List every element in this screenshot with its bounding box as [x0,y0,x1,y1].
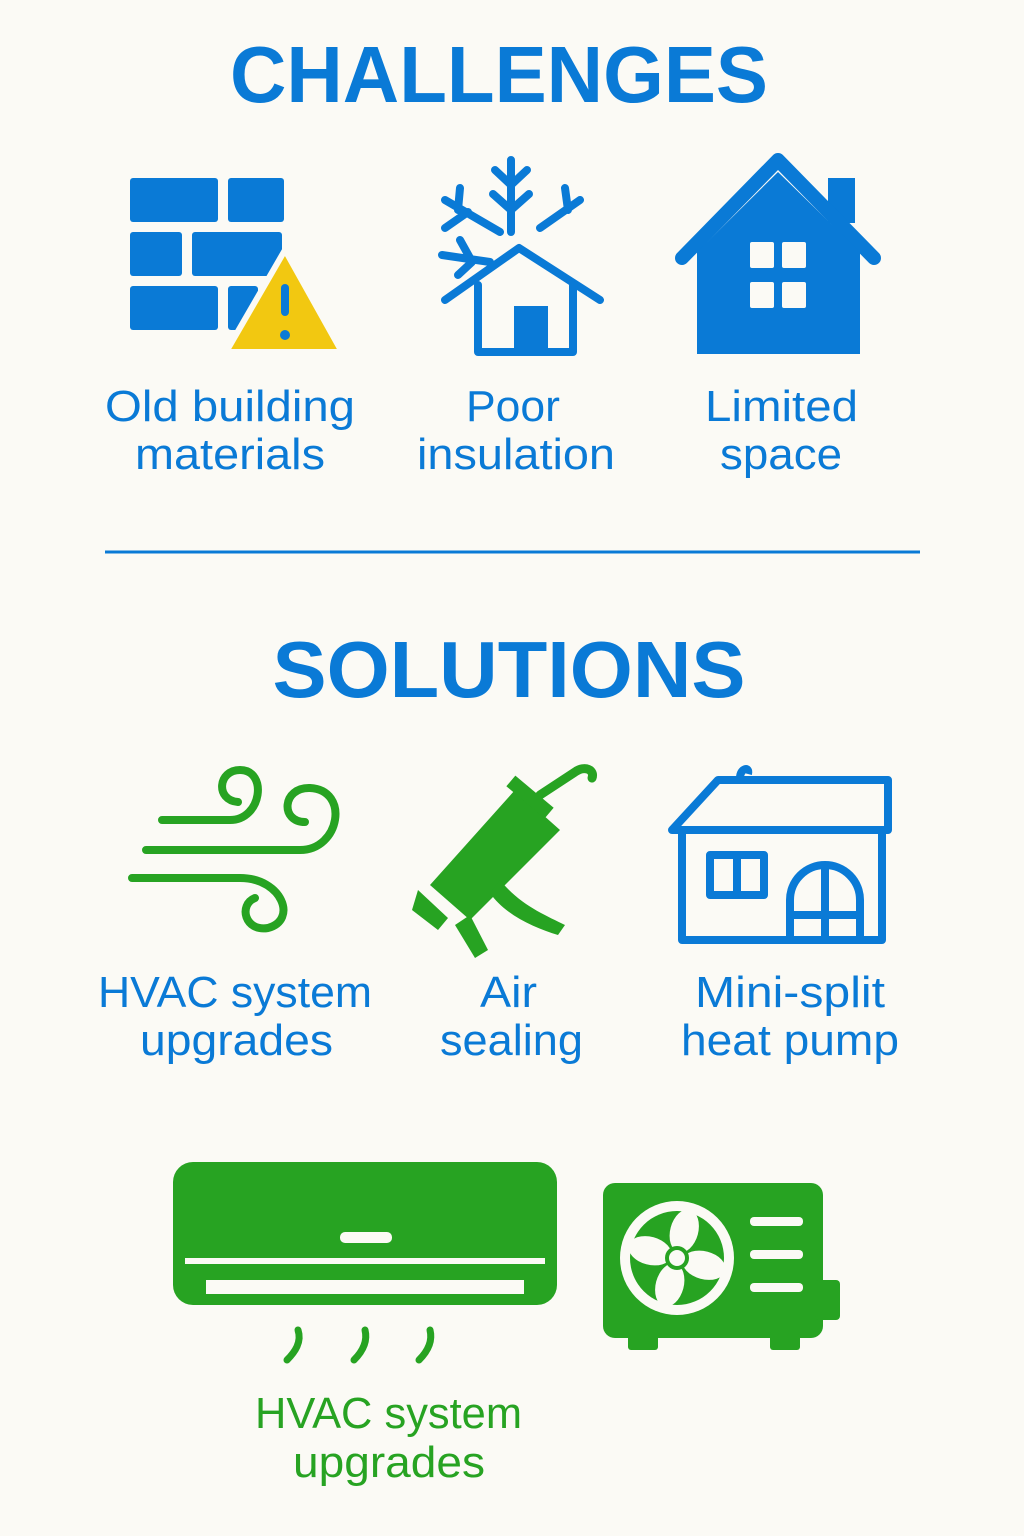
solution: air sealing [412,769,593,1065]
icon: outdoor unit [603,1183,840,1350]
challenge: old building materials [105,178,355,479]
label: limited space: Limited [705,382,858,431]
label: hvac system upgrades [98,968,372,1065]
icon: house with unit [672,769,888,940]
label: old building materials: materials [135,430,325,479]
label: poor insulation: Poor [466,382,560,431]
icon: house [682,160,874,354]
label: mini-split heat pump: Mini-split [695,968,885,1017]
label: mini-split heat pump [681,968,899,1065]
icon: snowflake house [442,160,600,352]
label: mini-split heat pump: heat pump [681,1016,899,1065]
illustration: mini-split system [173,1162,840,1487]
label: hvac system upgrades: HVAC system [98,968,372,1017]
title: solutions: SOLUTIONS [272,625,746,714]
label: hvac system upgrades: upgrades [140,1016,333,1065]
label: limited space [705,382,858,479]
icon: indoor unit [173,1162,557,1360]
label: air sealing: sealing [440,1016,583,1065]
label: limited space: space [720,430,842,479]
challenge: limited space [682,160,874,479]
icon: wind [132,770,335,928]
solution: hvac system upgrades [98,770,372,1065]
label: poor insulation: insulation [417,430,615,479]
title: challenges: CHALLENGES [230,30,768,119]
label: air sealing [440,968,583,1065]
icon: caulk gun [412,769,593,958]
label: hvac system upgrades (green): upgrades [293,1438,485,1487]
label: air sealing: Air [480,968,537,1017]
label: old building materials [105,382,355,479]
solution: mini-split heat pump [672,769,899,1065]
challenge: poor insulation [417,160,615,479]
icon: brick wall with warning [130,178,342,352]
label: hvac system upgrades (green): HVAC system [255,1389,522,1438]
label: poor insulation [417,382,615,479]
label: hvac system upgrades (green) [255,1389,522,1487]
label: old building materials: Old building [105,382,355,431]
